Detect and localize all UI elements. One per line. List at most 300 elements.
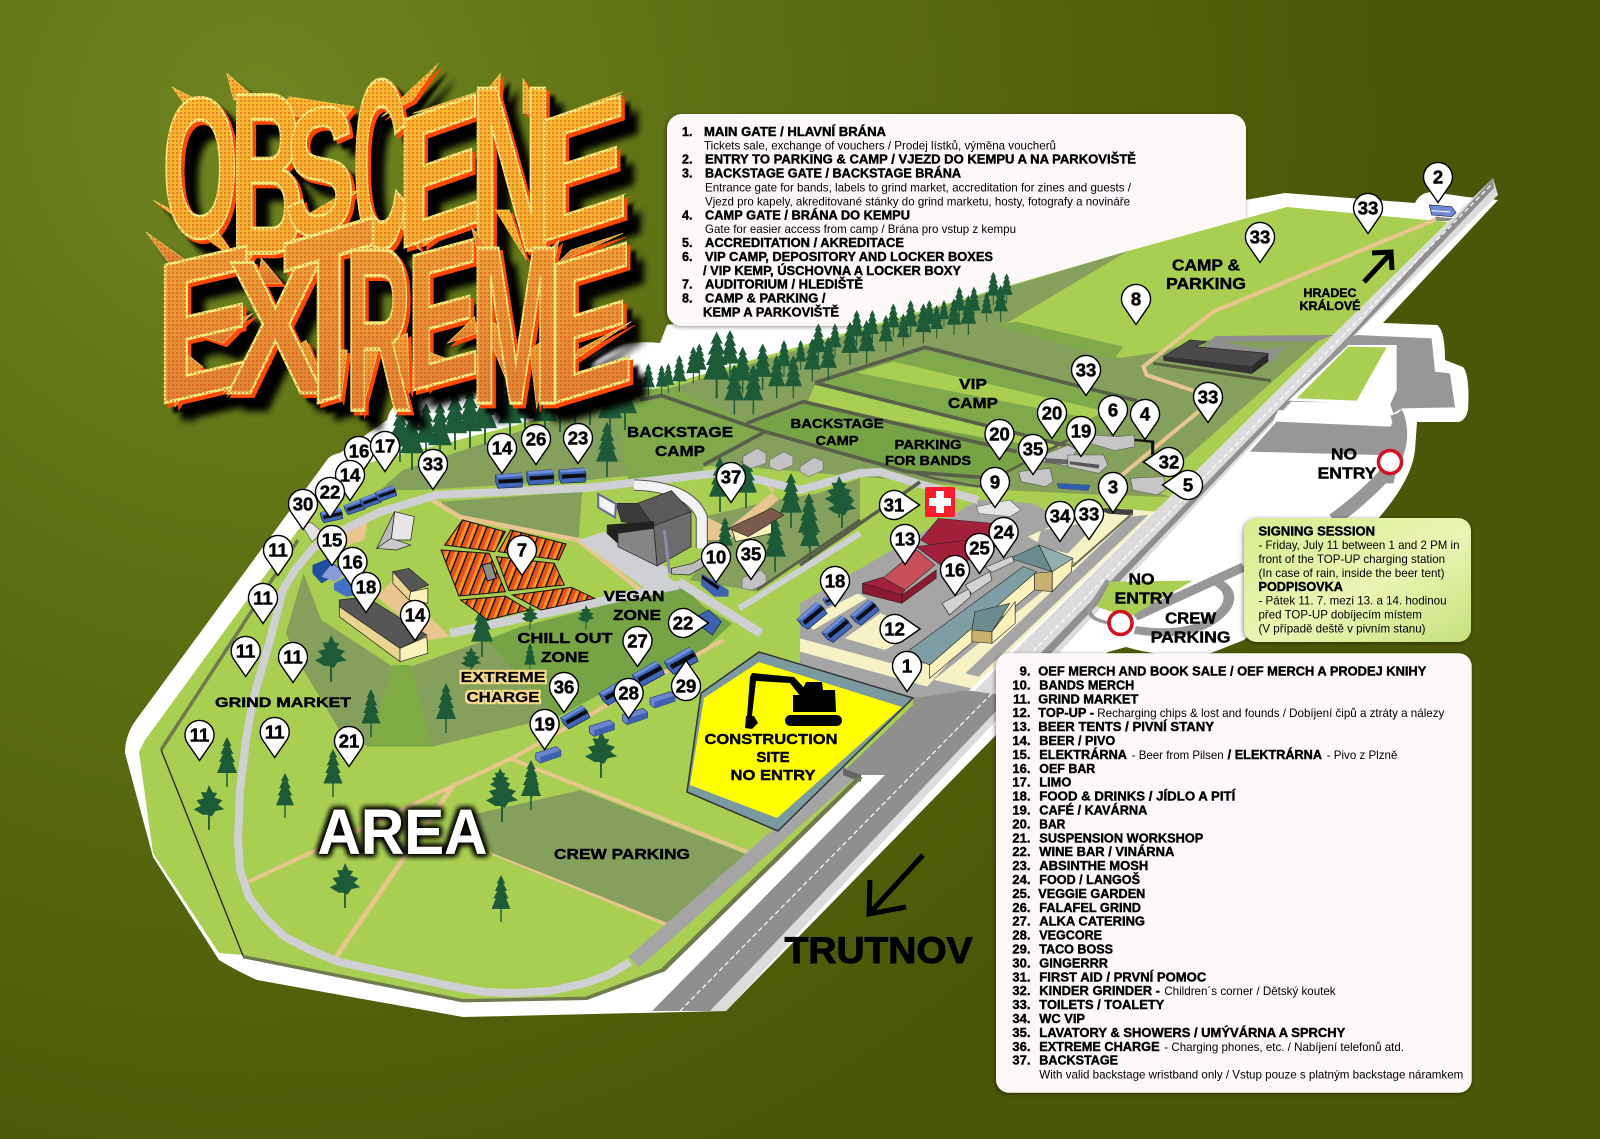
legend rows 9-37: 13. xyxy=(1012,719,1030,734)
pin 35 xyxy=(1018,434,1048,474)
pin 7 xyxy=(508,535,536,576)
pin 11: 11 xyxy=(268,540,288,560)
zones in detail-crop coordinates xyxy=(753,322,1137,470)
pin 14: 14 xyxy=(405,604,426,626)
legend rows 9-37: BEER / PIVO xyxy=(1039,734,1116,748)
backstage camp left xyxy=(614,388,764,480)
no entry signs xyxy=(1109,450,1402,634)
green wedge xyxy=(368,665,432,747)
pin 23: 23 xyxy=(568,428,588,448)
first-aid tent and gingerrr stall xyxy=(300,522,322,542)
pin 27 xyxy=(623,626,652,666)
seating: auditorium xyxy=(441,520,595,620)
pin 37: 37 xyxy=(721,466,741,488)
pin 16 xyxy=(940,555,970,596)
legend rows 9-37: WINE BAR / VINÁRNA xyxy=(1039,844,1174,859)
legend rows 9-37 xyxy=(1012,664,1463,1082)
pin 6 xyxy=(1098,395,1128,436)
pin 33: 33 xyxy=(1358,198,1378,218)
legend rows 9-37: 29. xyxy=(1012,942,1030,956)
legend rows 9-37: 36. xyxy=(1012,1039,1030,1054)
legend rows 1-8: AUDITORIUM / HLEDIŠTĚ xyxy=(705,277,863,292)
legend rows 9-37: 12. xyxy=(1012,705,1030,720)
pin 13 xyxy=(890,524,920,564)
pin 16: 16 xyxy=(349,440,369,462)
food stalls xyxy=(942,556,1014,615)
legend rows 9-37: Recharging chips & lost and founds / Dobíjení čipů a ztráty a nálezy xyxy=(1097,706,1444,720)
legend rows 1-8: Gate for easier access from camp / Brána pro vstup z kempu xyxy=(705,222,1016,236)
dirt path around auditorium xyxy=(432,500,640,590)
pin 11: 11 xyxy=(236,640,255,662)
map labels: CHILL OUT xyxy=(518,630,612,647)
legend rows 9-37: BACKSTAGE xyxy=(1039,1054,1118,1068)
pin 24 xyxy=(989,517,1018,558)
pin 22 xyxy=(668,608,708,638)
pin 14 xyxy=(336,460,364,500)
legend rows 9-37: WC VIP xyxy=(1039,1012,1085,1026)
map labels: PARKING xyxy=(1166,276,1246,293)
light footpaths xyxy=(450,532,860,633)
legend rows 1-8: CAMP GATE / BRÁNA DO KEMPU xyxy=(705,207,910,222)
pin 22 xyxy=(316,477,344,518)
legend rows 9-37: LAVATORY & SHOWERS / UMÝVÁRNA A SPRCHY xyxy=(1039,1025,1346,1040)
white map halo xyxy=(125,192,1498,1017)
legend rows 1-8: 4. xyxy=(682,208,692,222)
panel: legend 1-8 xyxy=(667,114,1246,326)
grey huts xyxy=(976,435,1165,517)
entrance plaza xyxy=(800,500,1155,698)
legend rows 1-8: VIP CAMP, DEPOSITORY AND LOCKER BOXES xyxy=(705,250,993,264)
legend rows 9-37: 15. xyxy=(1012,747,1030,762)
pin 12: 12 xyxy=(884,618,905,640)
legend rows 9-37: BANDS MERCH xyxy=(1039,678,1134,692)
signing text: front of the TOP-UP charging station xyxy=(1258,552,1445,566)
pin 19: 19 xyxy=(534,714,555,734)
pin 10 xyxy=(702,542,730,582)
legend rows 9-37: 14. xyxy=(1012,733,1030,748)
legend rows 9-37: GRIND MARKET xyxy=(1038,692,1139,706)
pin 35: 35 xyxy=(1023,438,1043,460)
buildings in west / centre xyxy=(312,448,881,763)
pin 5: 5 xyxy=(1183,474,1193,496)
legend rows 9-37: 26. xyxy=(1012,900,1030,915)
pin 3: 3 xyxy=(1108,476,1118,498)
pin 18 xyxy=(820,566,850,606)
pin 34 xyxy=(1046,501,1074,542)
logo word: OBSCENE: C xyxy=(353,30,407,298)
legend rows 9-37: 18. xyxy=(1012,789,1030,804)
pin 11 xyxy=(264,535,292,576)
legend rows 9-37: ABSINTHE MOSH xyxy=(1039,859,1148,873)
legend rows 9-37: 19. xyxy=(1012,802,1030,818)
pin 22: 22 xyxy=(673,612,693,634)
pin 14: 14 xyxy=(492,438,513,458)
legend rows 1-8: 5. xyxy=(682,236,692,250)
legend rows 9-37: 37. xyxy=(1012,1053,1030,1068)
forest and trees xyxy=(194,272,1013,922)
pin 15 xyxy=(318,525,346,566)
pin 29 xyxy=(672,660,700,701)
legend rows 1-8: 1. xyxy=(682,125,692,139)
pin 36 xyxy=(550,672,578,712)
legend rows 9-37: 17. xyxy=(1012,775,1030,790)
strip along the road xyxy=(1150,335,1345,497)
label: construction site: NO ENTRY xyxy=(730,767,816,784)
logo word: EXTREME: R xyxy=(345,200,411,460)
pin 17 xyxy=(370,431,400,472)
legend rows 9-37: 32. xyxy=(1012,983,1030,998)
map labels: CAMP xyxy=(655,443,705,460)
pin 33 xyxy=(1246,222,1274,262)
map labels: KRÁLOVÉ xyxy=(1300,298,1360,313)
buildings near gate xyxy=(800,435,1165,678)
camp building top right and gate xyxy=(1153,205,1456,381)
logo word: OBSCENE: E xyxy=(535,57,628,282)
map labels: PARKING xyxy=(894,437,962,452)
fence east xyxy=(757,520,860,590)
pin 5 xyxy=(1162,470,1203,500)
legend rows 9-37: EXTREME CHARGE xyxy=(1039,1040,1160,1054)
legend rows 9-37: 35. xyxy=(1012,1025,1030,1040)
catering house xyxy=(729,508,784,542)
legend rows 9-37: CAFÉ / KAVÁRNA xyxy=(1039,802,1147,818)
logo word: OBSCENE: N xyxy=(470,39,553,301)
stage xyxy=(598,485,704,575)
legend rows 9-37: ELEKTRÁRNA xyxy=(1039,747,1127,762)
pin 19 xyxy=(530,709,559,750)
pin 26 xyxy=(522,424,550,464)
long building xyxy=(339,597,428,662)
legend rows 1-8: KEMP A PARKOVIŠTĚ xyxy=(703,304,839,319)
logo word: OBSCENE: O xyxy=(162,57,238,280)
pin 14 xyxy=(400,600,430,640)
beer tents xyxy=(863,518,996,603)
legend rows 9-37: 23. xyxy=(1012,858,1030,873)
pin 28 xyxy=(614,678,643,718)
title logo: Obscene Extreme xyxy=(146,30,634,465)
crew parking no-entry area xyxy=(1090,567,1244,632)
pin 33: 33 xyxy=(1079,504,1099,524)
legend rows 9-37: BAR xyxy=(1039,817,1065,831)
legend rows 1-8: 2. xyxy=(682,153,692,167)
pin 12 xyxy=(880,614,920,644)
pin 1 xyxy=(892,651,922,692)
crew parking zone xyxy=(471,790,748,923)
map labels: ZONE xyxy=(541,649,589,666)
legend rows 1-8: 8. xyxy=(682,292,692,306)
pin 16: 16 xyxy=(342,552,363,572)
logo word: EXTREME: T xyxy=(283,164,375,465)
fence near gate 3 xyxy=(1099,508,1133,515)
legend rows 9-37: KINDER GRINDER - xyxy=(1039,984,1160,998)
pin 19 xyxy=(1066,416,1096,456)
legend rows 9-37: 22. xyxy=(1012,844,1030,859)
legend rows 9-37: VEGCORE xyxy=(1039,929,1102,943)
pin 11 xyxy=(231,636,260,676)
dirt paths xyxy=(249,640,751,960)
legend rows 9-37: - Pivo z Plzně xyxy=(1327,748,1398,762)
pin 33: 33 xyxy=(1198,386,1218,408)
legend rows 9-37: BEER TENTS / PIVNÍ STANY xyxy=(1038,719,1215,734)
legend rows 9-37: TACO BOSS xyxy=(1039,942,1113,956)
pin 20 xyxy=(985,419,1014,460)
pin 25 xyxy=(965,533,994,574)
signing text: - Pátek 11. 7. mezi 13. a 14. hodinou xyxy=(1258,594,1446,608)
map labels: TRUTNOV xyxy=(785,930,973,971)
pin 30 xyxy=(288,489,318,530)
legend rows 9-37: ALKA CATERING xyxy=(1039,915,1145,929)
map labels: FOR BANDS xyxy=(885,453,971,468)
pin 4 xyxy=(1130,399,1160,440)
pin 22: 22 xyxy=(320,482,340,502)
signing text xyxy=(1258,524,1460,636)
legend rows 9-37: FALAFEL GRIND xyxy=(1039,901,1141,915)
pin 30: 30 xyxy=(293,494,313,514)
legend rows 1-8: Vjezd pro kapely, akreditované stánky do grind marketu, hosty, fotografy a novináře xyxy=(705,194,1130,208)
map labels: AREA xyxy=(318,796,488,868)
legend rows 9-37: - Beer from Pilsen xyxy=(1132,748,1224,762)
map labels: CREW PARKING xyxy=(554,847,690,863)
pin 18: 18 xyxy=(825,570,845,592)
map labels: NO xyxy=(1331,446,1357,464)
long building with towers xyxy=(905,545,1073,678)
logo word: EXTREME: M xyxy=(470,200,562,451)
label: construction site: SITE xyxy=(756,749,790,766)
legend rows 9-37: FOOD / LANGOŠ xyxy=(1039,872,1140,887)
logo word: EXTREME: E xyxy=(547,198,634,448)
fence parking for bands xyxy=(800,442,979,487)
legend rows 9-37: Children´s corner / Dětský koutek xyxy=(1164,984,1337,998)
pin 2: 2 xyxy=(1433,166,1443,188)
logo word: OBSCENE xyxy=(153,30,628,302)
pin 33: 33 xyxy=(1250,226,1270,248)
legend rows 1-8 xyxy=(682,124,1136,319)
legend rows 1-8: CAMP & PARKING / xyxy=(705,292,826,306)
pin 26: 26 xyxy=(526,428,546,450)
map labels: NO xyxy=(1128,572,1154,588)
pin 33: 33 xyxy=(423,454,443,474)
pin 33 xyxy=(418,449,448,490)
pin 37 xyxy=(716,462,746,502)
pin 33 xyxy=(1194,382,1222,422)
pin 20: 20 xyxy=(1042,402,1062,424)
pin 16 xyxy=(344,436,374,476)
pin 31 xyxy=(879,490,920,520)
direction arrows xyxy=(869,252,1392,914)
pin 28: 28 xyxy=(618,682,639,704)
legend rows 9-37: 21. xyxy=(1012,830,1030,845)
inner service road xyxy=(634,772,850,962)
first aid cross xyxy=(925,487,955,517)
pin 35: 35 xyxy=(741,544,761,564)
pin 11 xyxy=(248,583,278,624)
pin 10: 10 xyxy=(706,546,726,568)
signing text: - Friday, July 11 between 1 and 2 PM in xyxy=(1258,538,1460,552)
legend rows 9-37: 10. xyxy=(1012,677,1030,692)
logo word: EXTREME: E xyxy=(155,200,255,448)
pin 11: 11 xyxy=(253,588,273,608)
pin 32: 32 xyxy=(1159,452,1179,472)
pin 19: 19 xyxy=(1071,420,1091,442)
logo word: OBSCENE: B xyxy=(230,45,304,302)
service road end cap xyxy=(843,768,861,782)
pin 33 xyxy=(1072,355,1100,396)
pin 17: 17 xyxy=(375,436,395,456)
land base xyxy=(139,207,1448,1002)
pin 24: 24 xyxy=(993,522,1015,542)
map labels: CAMP xyxy=(816,433,859,448)
legend rows 9-37: 9. xyxy=(1020,664,1030,678)
signing text: před TOP-UP dobíjecím místem xyxy=(1258,608,1422,622)
legend rows 9-37: 27. xyxy=(1012,914,1030,929)
signing text: (V případě deště v pivním stanu) xyxy=(1258,622,1426,636)
legend rows 9-37: / ELEKTRÁRNA xyxy=(1228,747,1322,762)
pin 11 xyxy=(260,717,289,758)
pin 27: 27 xyxy=(627,630,648,652)
map pins xyxy=(185,162,1452,767)
light field around stage xyxy=(314,475,860,663)
legend rows 9-37: 24. xyxy=(1012,872,1030,887)
pin 16: 16 xyxy=(945,560,965,580)
pin 36: 36 xyxy=(554,676,574,698)
legend rows 9-37: 25. xyxy=(1012,886,1030,901)
pin 15: 15 xyxy=(322,530,342,550)
hill left xyxy=(286,573,621,747)
map labels: BACKSTAGE xyxy=(627,424,733,441)
pin 8 xyxy=(1122,284,1150,324)
backstage containers xyxy=(743,448,823,477)
legend rows 9-37: LIMO xyxy=(1039,776,1072,790)
grey-green top wedge xyxy=(441,492,582,540)
pin 13: 13 xyxy=(895,528,915,550)
legend rows 9-37: OEF BAR xyxy=(1039,762,1095,776)
fence around area xyxy=(161,540,860,1001)
small building xyxy=(393,568,429,603)
legend rows 9-37: 11. xyxy=(1013,691,1030,706)
construction site xyxy=(687,652,913,831)
road xyxy=(638,178,1498,1011)
logo word: EXTREME: E xyxy=(406,195,479,434)
label: construction site: CONSTRUCTION xyxy=(704,731,838,748)
parking for bands field xyxy=(800,403,1068,484)
legend rows 9-37: OEF MERCH AND BOOK SALE / OEF MERCH A PRODEJ KNIHY xyxy=(1038,664,1427,678)
map labels: VEGAN xyxy=(604,588,664,605)
pin 3 xyxy=(1098,472,1128,512)
pin 1: 1 xyxy=(902,656,912,676)
pin 8: 8 xyxy=(1131,288,1141,310)
legend rows 9-37: TOP-UP - xyxy=(1038,706,1094,720)
pin 11 xyxy=(185,720,214,760)
label: construction site xyxy=(704,731,838,784)
legend rows 9-37: 31. xyxy=(1012,969,1030,984)
pin 14: 14 xyxy=(340,464,361,486)
signing text: (In case of rain, inside the beer tent) xyxy=(1258,566,1444,580)
legend rows 9-37: GINGERRR xyxy=(1039,956,1108,970)
legend rows 9-37: VEGGIE GARDEN xyxy=(1038,887,1145,901)
map labels: ENTRY xyxy=(1318,466,1377,482)
map labels: PARKING xyxy=(1151,630,1231,646)
grey-green behind stage xyxy=(689,478,860,592)
main grey loop path xyxy=(238,472,978,993)
legend rows 9-37: 33. xyxy=(1012,997,1030,1012)
legend rows 9-37: 20. xyxy=(1012,816,1030,831)
pin 18 xyxy=(352,572,380,612)
pin 16 xyxy=(338,547,367,588)
legend rows 1-8: Tickets sale, exchange of vouchers / Prodej lístků, výměna voucherů xyxy=(704,139,1056,153)
legend rows 9-37: With valid backstage wristband only / Vstup pouze s platným backstage náramkem xyxy=(1039,1068,1463,1082)
pin 21 xyxy=(334,726,364,766)
legend rows 1-8: BACKSTAGE GATE / BACKSTAGE BRÁNA xyxy=(705,166,961,181)
pin 33: 33 xyxy=(1076,360,1096,380)
map labels: CHARGE xyxy=(466,690,540,706)
icon: excavator xyxy=(745,673,842,729)
legend rows 1-8: Entrance gate for bands, labels to grind market, accreditation for zines and guests / xyxy=(705,180,1132,194)
map labels: CAMP xyxy=(948,395,998,412)
map labels: ZONE xyxy=(613,607,661,624)
map labels: GRIND MARKET xyxy=(215,694,352,710)
pin 11: 11 xyxy=(190,724,209,746)
chill out zone xyxy=(486,585,732,717)
map labels xyxy=(215,258,1377,971)
legend rows 9-37: FOOD & DRINKS / JÍDLO A PITÍ xyxy=(1039,789,1236,804)
legend rows 1-8: 6. xyxy=(682,250,692,264)
right of the road: parking and grey lots xyxy=(1250,335,1455,520)
logo word: EXTREME xyxy=(146,164,634,465)
stalls xyxy=(312,468,881,763)
signing text: PODPISOVKA xyxy=(1258,580,1343,594)
legend rows 1-8: ENTRY TO PARKING & CAMP / VJEZD DO KEMPU A NA PARKOVIŠTĚ xyxy=(705,152,1136,167)
pin 32 xyxy=(1144,448,1184,476)
pin 35 xyxy=(736,539,766,580)
map labels: HRADEC xyxy=(1304,286,1357,300)
pin 33 xyxy=(1354,193,1382,234)
legend rows 9-37: - Charging phones, etc. / Nabíjení telefonů atd. xyxy=(1164,1040,1404,1054)
map: ground and zones xyxy=(139,178,1498,1011)
map labels: BACKSTAGE xyxy=(790,416,884,431)
legend rows 9-37: TOILETS / TOALETY xyxy=(1039,998,1165,1012)
panel: legend 9-37 xyxy=(996,653,1472,1093)
panel: signing session xyxy=(1244,518,1471,642)
logo word: OBSCENE: S xyxy=(285,65,355,279)
dirt patch near bars xyxy=(343,520,368,547)
tent white xyxy=(377,512,414,550)
legend rows 1-8: 3. xyxy=(682,167,692,181)
pin 33 xyxy=(1074,499,1104,540)
pin 18: 18 xyxy=(356,576,376,598)
pin 23 xyxy=(564,423,592,464)
pin 25: 25 xyxy=(969,538,990,558)
legend rows 9-37: FIRST AID / PRVNÍ POMOC xyxy=(1039,969,1206,984)
legend rows 9-37: 30. xyxy=(1012,955,1030,970)
pin 4: 4 xyxy=(1140,404,1151,424)
camp fences xyxy=(640,347,1137,565)
pin 29: 29 xyxy=(676,676,696,696)
map labels: ENTRY xyxy=(1114,590,1174,608)
map labels: CREW xyxy=(1165,610,1217,628)
map labels: CAMP & xyxy=(1172,258,1240,274)
legend rows 9-37: 34. xyxy=(1012,1011,1030,1026)
pin 11: 11 xyxy=(283,646,303,668)
map labels: VIP xyxy=(959,376,987,393)
legend rows 9-37: 16. xyxy=(1012,761,1030,776)
legend rows 1-8: ACCREDITATION / AKREDITACE xyxy=(705,236,904,250)
map labels: EXTREME xyxy=(460,670,546,686)
pin 6: 6 xyxy=(1108,400,1118,420)
pin 21: 21 xyxy=(339,730,359,752)
pin 9 xyxy=(980,467,1010,508)
pin 2 xyxy=(1424,162,1452,202)
pin 14 xyxy=(488,433,516,474)
